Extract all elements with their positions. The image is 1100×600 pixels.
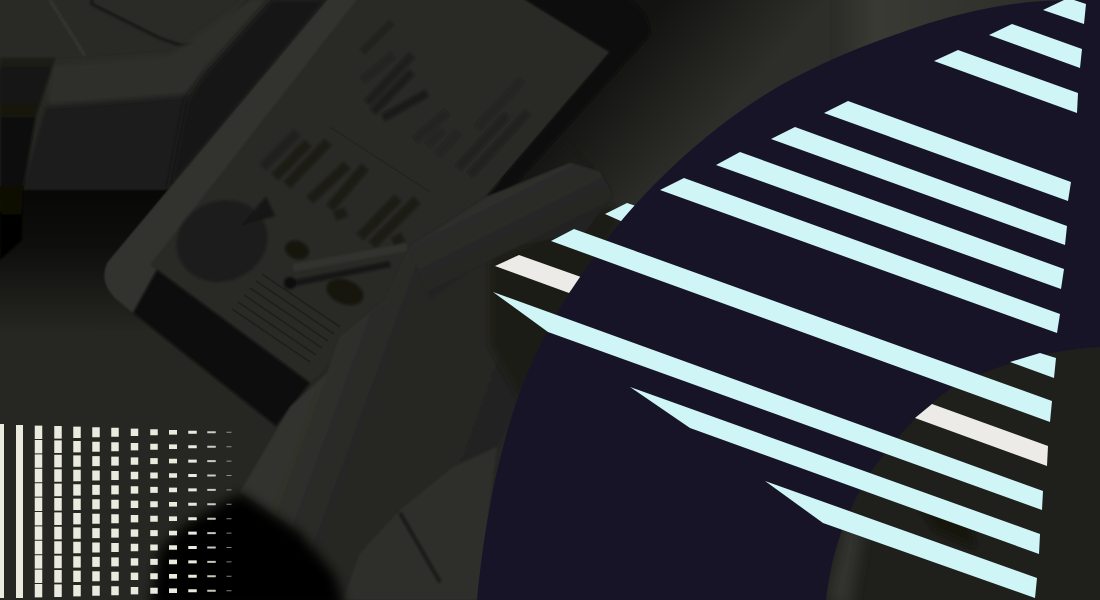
- text block on tablet: [232, 274, 340, 362]
- divider line on tablet: [330, 127, 430, 192]
- diagonal stripes: [493, 0, 1086, 598]
- right hand and wrist: [240, 163, 620, 600]
- tablet dark right bezel: [487, 0, 650, 196]
- tablet: [105, 0, 650, 426]
- tablet dark bottom bezel: [133, 270, 310, 426]
- stripe 6: [716, 152, 1064, 289]
- inner photo circle: [826, 347, 1100, 600]
- stripe 5: [771, 127, 1067, 245]
- cream stripe behind the navy shape: [495, 255, 581, 293]
- small pie charts on tablet: [283, 237, 367, 310]
- middle bar chart: [263, 133, 417, 245]
- sleeve cuff: [0, 58, 55, 260]
- stripe 4: [824, 101, 1071, 201]
- finger: [410, 163, 612, 300]
- table surface: [0, 0, 1100, 210]
- hand lower shaded area: [22, 92, 200, 190]
- stripe 2: [989, 24, 1082, 68]
- stripe 10: long: [493, 292, 1043, 510]
- cream stripe inside the inner circle: [915, 404, 1048, 466]
- top bar chart: [362, 22, 528, 175]
- tablet screen: [105, 0, 610, 383]
- pen: [284, 247, 407, 289]
- dark jacket sleeve: [150, 493, 345, 600]
- table under the arm: [343, 447, 497, 600]
- left hand and sleeve: [0, 0, 330, 335]
- back of hand shadow: [168, 0, 330, 192]
- small cyan stripe behind the navy shape: [605, 203, 636, 222]
- shadow below hand: [0, 186, 175, 335]
- stripe 11: long: [630, 387, 1040, 554]
- table edge line: [50, 0, 85, 56]
- stripe 9: small inner: [1010, 353, 1056, 378]
- solid bars: [0, 424, 4, 598]
- stripe 3: [934, 50, 1078, 113]
- pie chart on tablet: [165, 188, 279, 294]
- stripe 12: long: [765, 481, 1037, 598]
- hand lit area: [46, 0, 272, 106]
- dot grid pattern: [0, 424, 229, 598]
- tablet frame left band: [105, 0, 358, 314]
- phone on the table: [92, 0, 252, 45]
- navy arc shape: [477, 0, 1100, 600]
- stripe 1: [1043, 0, 1086, 24]
- stripe 8: [551, 229, 1052, 422]
- shadow area under the fingers: [490, 205, 620, 400]
- stripe 7: [660, 178, 1060, 333]
